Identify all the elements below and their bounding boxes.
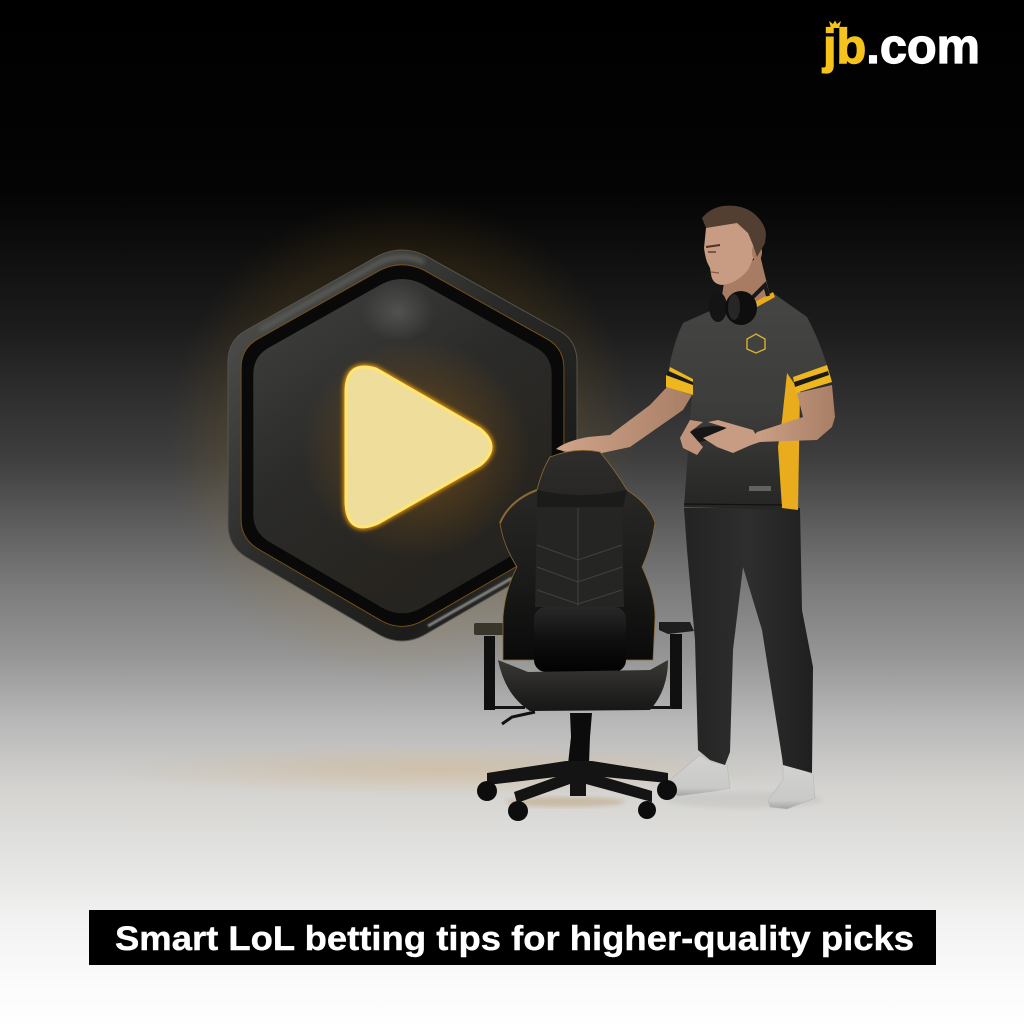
jersey side panel xyxy=(778,373,800,510)
chair shadow xyxy=(505,797,625,807)
left wing edge xyxy=(500,490,537,523)
logo wordmark: jb.com xyxy=(822,20,980,74)
banner background xyxy=(89,910,936,965)
rim lower-right highlight xyxy=(428,578,512,626)
title banner xyxy=(89,910,936,965)
casters xyxy=(477,780,677,821)
play triangle halo xyxy=(346,367,491,527)
hair xyxy=(702,206,766,257)
gaming chair xyxy=(474,450,694,821)
jersey small print xyxy=(749,486,771,491)
left armrest xyxy=(474,623,525,710)
right hand xyxy=(703,420,760,453)
chair backrest xyxy=(500,450,655,660)
seat lever xyxy=(502,712,535,724)
left hand xyxy=(680,420,703,455)
left shoe xyxy=(670,755,730,796)
head and neck xyxy=(700,206,770,315)
ear xyxy=(752,243,762,261)
headrest seam xyxy=(537,490,627,507)
hexagon plate xyxy=(253,279,552,613)
eye xyxy=(708,251,716,253)
left arm xyxy=(556,387,692,463)
glow behind hexagon xyxy=(167,195,637,685)
jersey hem xyxy=(684,504,782,505)
trousers xyxy=(684,508,813,773)
jersey collar xyxy=(755,292,775,307)
right arm xyxy=(745,385,835,447)
play triangle xyxy=(346,367,491,527)
chair seat xyxy=(498,660,668,711)
floor glow xyxy=(110,744,770,796)
mouth xyxy=(711,272,719,273)
gas lift xyxy=(568,713,592,764)
hexagon groove xyxy=(241,265,564,626)
right sleeve stripes xyxy=(793,365,832,393)
logo crown xyxy=(829,20,841,28)
hexagon outer rim xyxy=(228,250,577,641)
logo: jb.com xyxy=(822,20,980,74)
person xyxy=(556,206,835,809)
controller xyxy=(688,426,725,442)
jersey hexagon emblem xyxy=(747,334,765,353)
right armrest xyxy=(650,622,694,709)
eye and brow xyxy=(706,245,720,247)
icon: hexagon play badge xyxy=(228,250,577,641)
left sleeve stripes xyxy=(666,367,693,395)
headphones xyxy=(709,285,768,325)
backrest panel xyxy=(535,507,624,607)
rim top highlight xyxy=(260,257,424,330)
lumbar pillow xyxy=(534,607,626,672)
play button glow xyxy=(300,337,530,557)
jersey xyxy=(666,293,832,510)
chair base xyxy=(487,761,668,803)
headset microphone xyxy=(700,274,709,279)
face xyxy=(704,218,758,285)
plate highlight xyxy=(362,282,434,342)
shoe shadows xyxy=(667,792,823,808)
banner text: Smart LoL betting tips for higher-quality picks xyxy=(115,920,914,958)
right shoe xyxy=(768,765,815,809)
neck xyxy=(722,255,770,315)
